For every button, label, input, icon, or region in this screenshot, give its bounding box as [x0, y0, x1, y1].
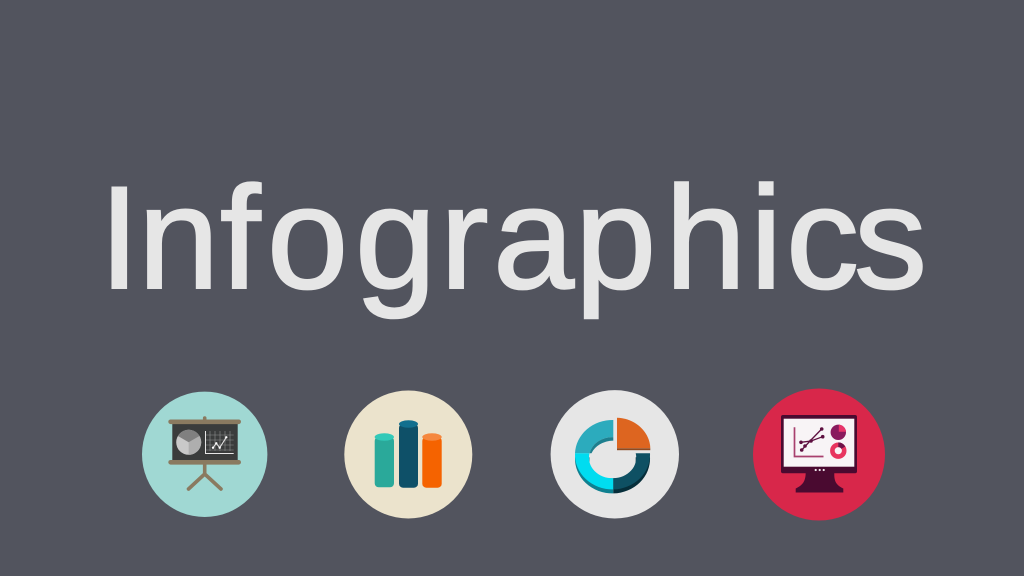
screen line chart	[794, 427, 824, 456]
donut inner shadow	[590, 437, 613, 453]
donut lower-right segment	[613, 453, 650, 489]
monitor dots	[815, 469, 825, 471]
screen pie chart	[831, 425, 846, 440]
orange cylinder	[422, 433, 442, 488]
icon: presentation board	[142, 392, 267, 517]
icon: monitor	[753, 388, 885, 520]
line chart	[206, 431, 234, 454]
orange quarter	[617, 418, 650, 448]
blue cylinder	[399, 420, 418, 488]
pie chart	[176, 430, 201, 455]
icon: bar cylinders	[344, 390, 472, 518]
board rails	[168, 420, 241, 465]
board stand	[188, 418, 221, 489]
monitor stand	[796, 473, 843, 492]
monitor screen	[784, 419, 854, 467]
donut lower-left segment	[575, 453, 613, 489]
icon: donut chart	[551, 390, 679, 518]
monitor frame	[781, 415, 857, 473]
donut depth	[575, 457, 650, 493]
board panel	[172, 423, 238, 462]
teal cylinder	[375, 433, 394, 487]
screen ring chart	[832, 442, 845, 457]
title: Infographics	[99, 156, 927, 319]
donut upper-left segment	[575, 420, 613, 453]
